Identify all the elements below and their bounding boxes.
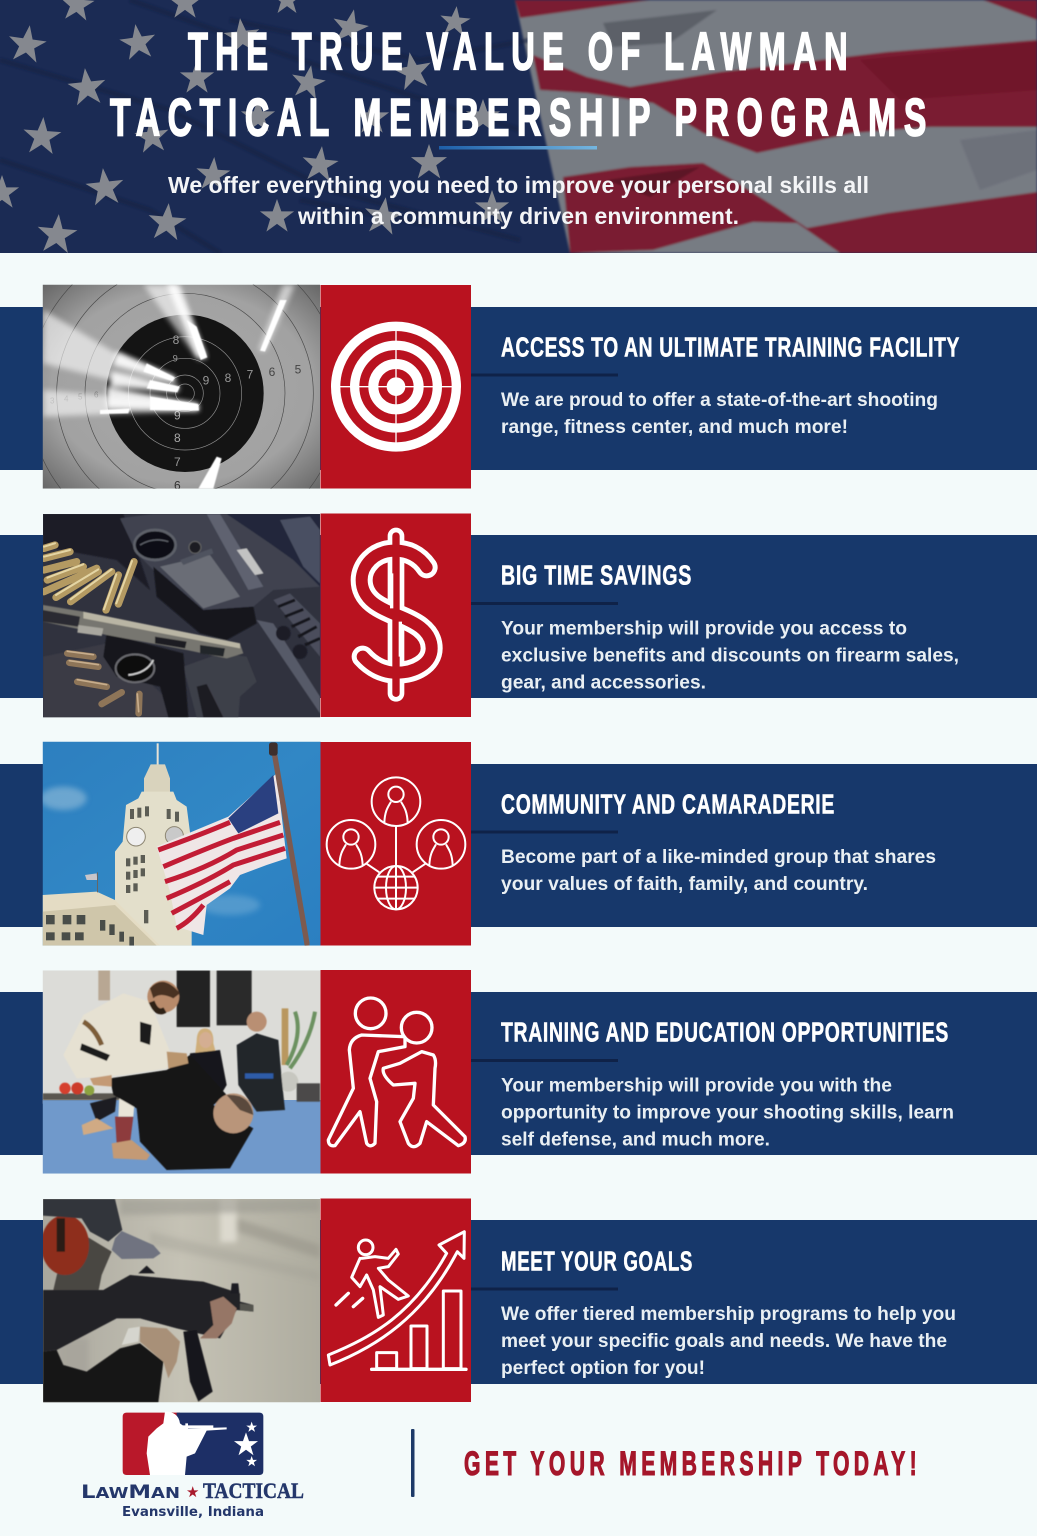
heading: BIG TIME SAVINGS	[501, 560, 692, 590]
body text: your values of faith, family, and country.	[501, 873, 868, 895]
icon: dollar sign	[362, 536, 432, 693]
light streaks	[43, 285, 295, 489]
icon: community network	[327, 777, 465, 909]
photo: shooting target: 8	[173, 333, 180, 347]
logo wordmark: TACTICAL	[203, 1478, 304, 1503]
body text: gear, and accessories.	[501, 672, 706, 694]
photo: shooting target: 6	[269, 365, 276, 379]
photo: shooting target: 9	[174, 408, 181, 422]
logo wordmark: ★	[186, 1484, 199, 1501]
red icon tile	[320, 285, 471, 488]
body text: meet your specific goals and needs. We have the	[501, 1330, 947, 1352]
body text: Your membership will provide you with the	[501, 1074, 892, 1096]
photo: shooting target: 9	[203, 374, 210, 388]
heading: MEET YOUR GOALS	[501, 1246, 693, 1276]
divider rule	[471, 1288, 618, 1290]
photo: clock tower and american flag	[40, 742, 321, 946]
red icon tile	[320, 742, 471, 946]
photo: shooting target: 8	[225, 371, 232, 385]
red icon tile	[320, 970, 471, 1174]
icon: sparring figures	[328, 998, 465, 1147]
flag on pole	[157, 773, 287, 935]
seated woman	[195, 1028, 217, 1055]
body text: self defense, and much more.	[501, 1128, 770, 1150]
divider rule	[471, 1059, 618, 1062]
panel: meet your goals	[0, 1198, 1037, 1402]
panel: training and education	[0, 970, 1037, 1174]
logo wordmark: LAW MAN	[81, 1481, 180, 1503]
navy band	[0, 1220, 1037, 1384]
body text	[501, 389, 938, 438]
photo: firearms and ammunition	[43, 514, 320, 717]
panel: big time savings	[0, 514, 1037, 717]
divider rule	[471, 830, 618, 834]
photo: shooting target	[42, 284, 320, 489]
photo: shooting target: 6	[174, 478, 181, 492]
logo wordmark	[81, 1478, 304, 1503]
flag stars	[0, 0, 509, 254]
title	[110, 22, 934, 148]
body text: We are proud to offer a state-of-the-art shooting	[501, 389, 938, 411]
photo: shooting target: 7	[174, 455, 181, 469]
logo location: Evansville, Indiana	[122, 1505, 264, 1520]
body text: Become part of a like-minded group that shares	[501, 846, 936, 868]
body text: opportunity to improve your shooting skills, learn	[501, 1102, 954, 1124]
navy band	[0, 992, 1037, 1155]
body text: We offer tiered membership programs to help you	[501, 1303, 956, 1325]
photo: shooting target: 4	[64, 394, 69, 403]
photo: shooting target: 5	[78, 392, 83, 401]
navy band	[0, 535, 1037, 698]
subtitle: We offer everything you need to improve your personal skills all	[168, 172, 869, 198]
title underline	[439, 146, 597, 150]
photo: shooting target: 6	[94, 390, 99, 399]
photo: shooting target: 7	[247, 368, 254, 382]
flag photo background	[0, 0, 1037, 254]
grappler on floor in black gi	[110, 1055, 253, 1170]
body text: exclusive benefits and discounts on firearm sales,	[501, 644, 959, 666]
heading: COMMUNITY AND CAMARADERIE	[501, 788, 835, 820]
divider rule	[471, 602, 618, 605]
navy band	[0, 764, 1037, 927]
body text: Your membership will provide you access to	[501, 618, 907, 640]
icon: climbing growth chart	[328, 1232, 466, 1369]
body text	[501, 618, 959, 694]
divider rule	[471, 374, 618, 376]
body text	[501, 1303, 956, 1379]
header banner with flag background	[0, 0, 1037, 254]
standing partner in white gi	[63, 993, 170, 1078]
subtitle: within a community driven environment.	[297, 203, 739, 229]
icon: target	[336, 326, 456, 447]
navy band	[0, 307, 1037, 470]
logo shield	[123, 1412, 263, 1475]
photo: shooting target: 8	[174, 431, 181, 445]
blue field folds	[0, 0, 530, 253]
footer divider	[411, 1429, 414, 1497]
body text: range, fitness center, and much more!	[501, 416, 848, 438]
body text: perfect option for you!	[501, 1357, 705, 1379]
panel: access to training facility	[0, 284, 1037, 489]
body text	[501, 846, 936, 895]
photo: shooting target: 5	[295, 362, 302, 376]
photo: shooting target: 9	[173, 353, 178, 363]
red icon tile	[320, 1198, 471, 1402]
logo: Lawman Tactical	[81, 1412, 304, 1520]
seated man	[247, 1012, 267, 1032]
panel: community and camaraderie	[0, 742, 1037, 946]
pistol	[183, 653, 257, 717]
body text	[501, 1074, 954, 1150]
subtitle	[168, 172, 869, 229]
bullets	[44, 543, 139, 713]
red icon tile	[320, 514, 471, 717]
photo: martial arts training	[43, 970, 321, 1174]
photo: shooting target: 3	[50, 396, 55, 405]
photo: shooter with rifle	[41, 1199, 320, 1402]
